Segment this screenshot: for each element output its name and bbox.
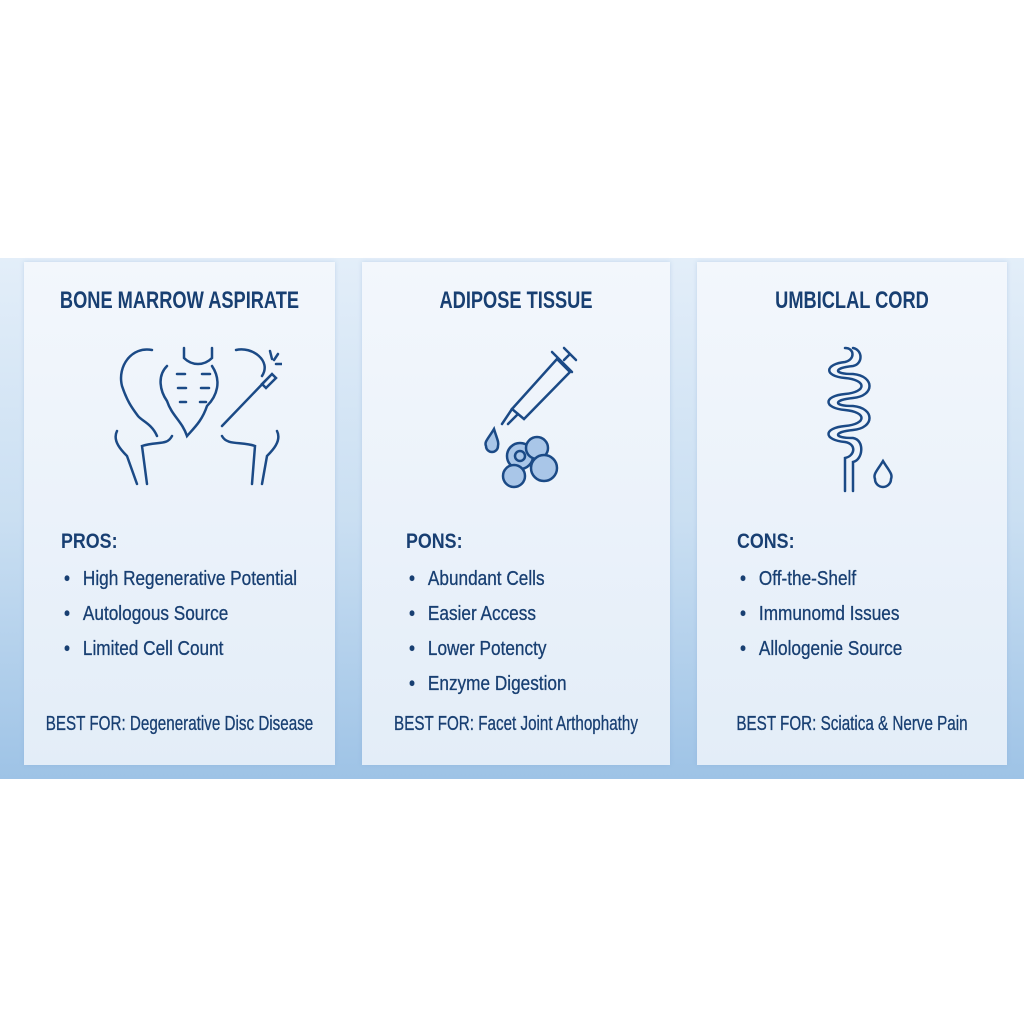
title: BONE MARROW ASPIRATE	[60, 287, 299, 314]
best for: BEST FOR: Facet Joint Arthophathy	[394, 713, 638, 735]
list: pros	[64, 568, 297, 660]
title: UMBICLAL CORD	[775, 287, 929, 314]
list: pros: Limited Cell Count	[83, 638, 223, 660]
heading: pros: PROS:	[61, 530, 118, 553]
list: pros: High Regenerative Potential	[83, 568, 297, 590]
panel: umbilical	[697, 262, 1007, 765]
icon: syringe and cells	[484, 346, 578, 488]
list: Easier Access	[428, 603, 536, 625]
list	[410, 568, 567, 695]
best for: BEST FOR: Sciatica & Nerve Pain	[736, 713, 968, 735]
list: Enzyme Digestion	[428, 673, 567, 695]
background band	[0, 258, 1024, 779]
title: ADIPOSE TISSUE	[439, 287, 593, 314]
list: Abundant Cells	[428, 568, 545, 590]
best for: BEST FOR: Degenerative Disc Disease	[46, 713, 313, 735]
list: Allologenie Source	[759, 638, 902, 660]
heading: pons: PONS:	[406, 530, 463, 553]
icon: cord and drop	[827, 346, 893, 492]
list: pros: Autologous Source	[83, 603, 228, 625]
panel: adipose	[362, 262, 670, 765]
list: Immunomd Issues	[759, 603, 899, 625]
list	[740, 568, 902, 660]
icon: pelvis	[114, 346, 282, 486]
list: Off-the-Shelf	[759, 568, 856, 590]
heading: cons: CONS:	[737, 530, 795, 553]
panel: bone marrow	[24, 262, 335, 765]
list: Lower Potencty	[428, 638, 546, 660]
